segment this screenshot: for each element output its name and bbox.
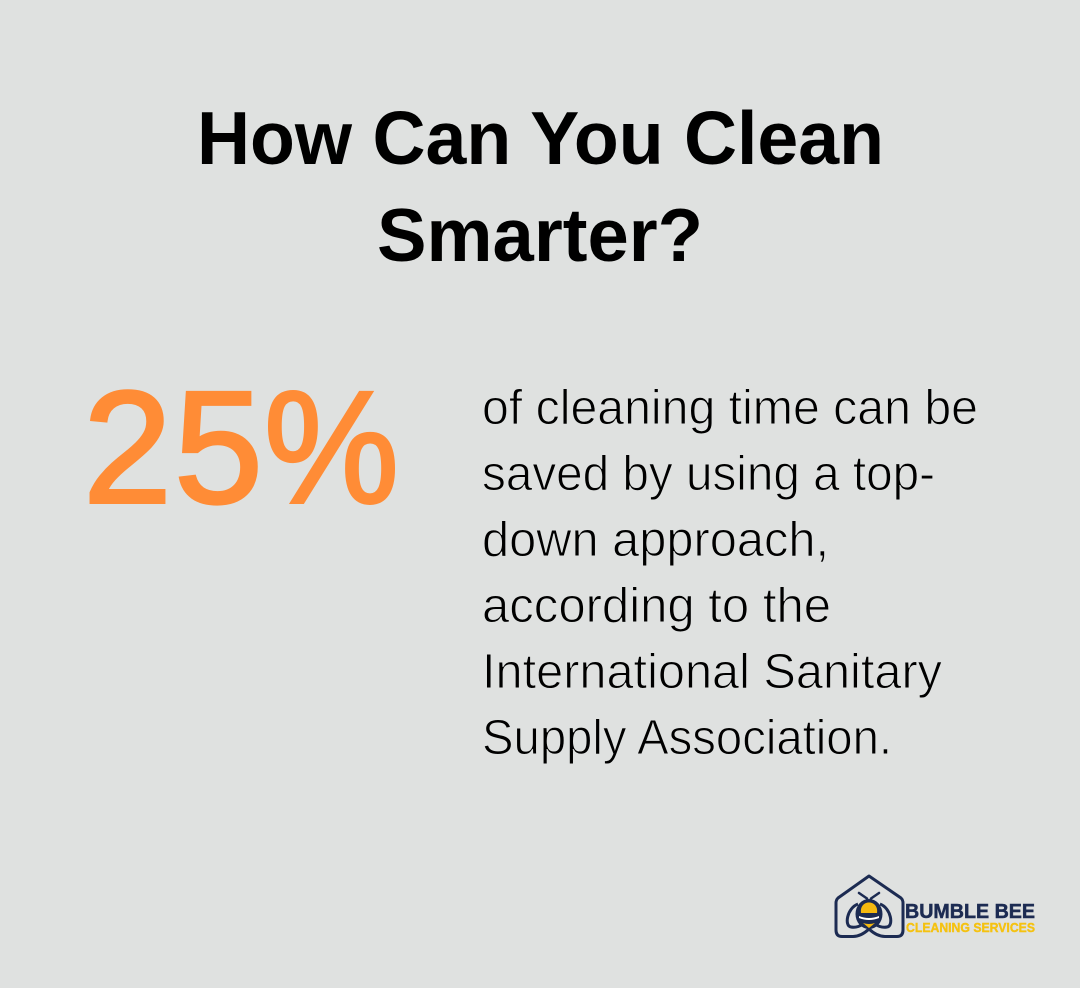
description text: saved by using a top-: [482, 447, 935, 501]
description text: of cleaning time can be: [482, 381, 978, 435]
icon: house outline with bee: [836, 876, 903, 936]
description text: International Sanitary: [482, 645, 942, 699]
title: How Can You Clean: [197, 96, 884, 180]
statistic: 25%: 2: [83, 358, 172, 536]
description text: [482, 381, 978, 765]
title: [197, 96, 884, 277]
logo tagline: CLEANING SERVICES: [906, 920, 1035, 935]
logo wordmark: BUMBLE BEE: [905, 901, 1035, 923]
description text: Supply Association.: [482, 711, 892, 765]
statistic: 25%: 5: [174, 358, 263, 536]
description text: according to the: [482, 579, 831, 633]
statistic: 25%: [83, 358, 399, 536]
logo: Bumble Bee Cleaning Services: [836, 876, 1035, 936]
title: Smarter?: [377, 193, 703, 277]
description text: down approach,: [482, 513, 829, 567]
statistic: 25%: %: [264, 358, 399, 536]
